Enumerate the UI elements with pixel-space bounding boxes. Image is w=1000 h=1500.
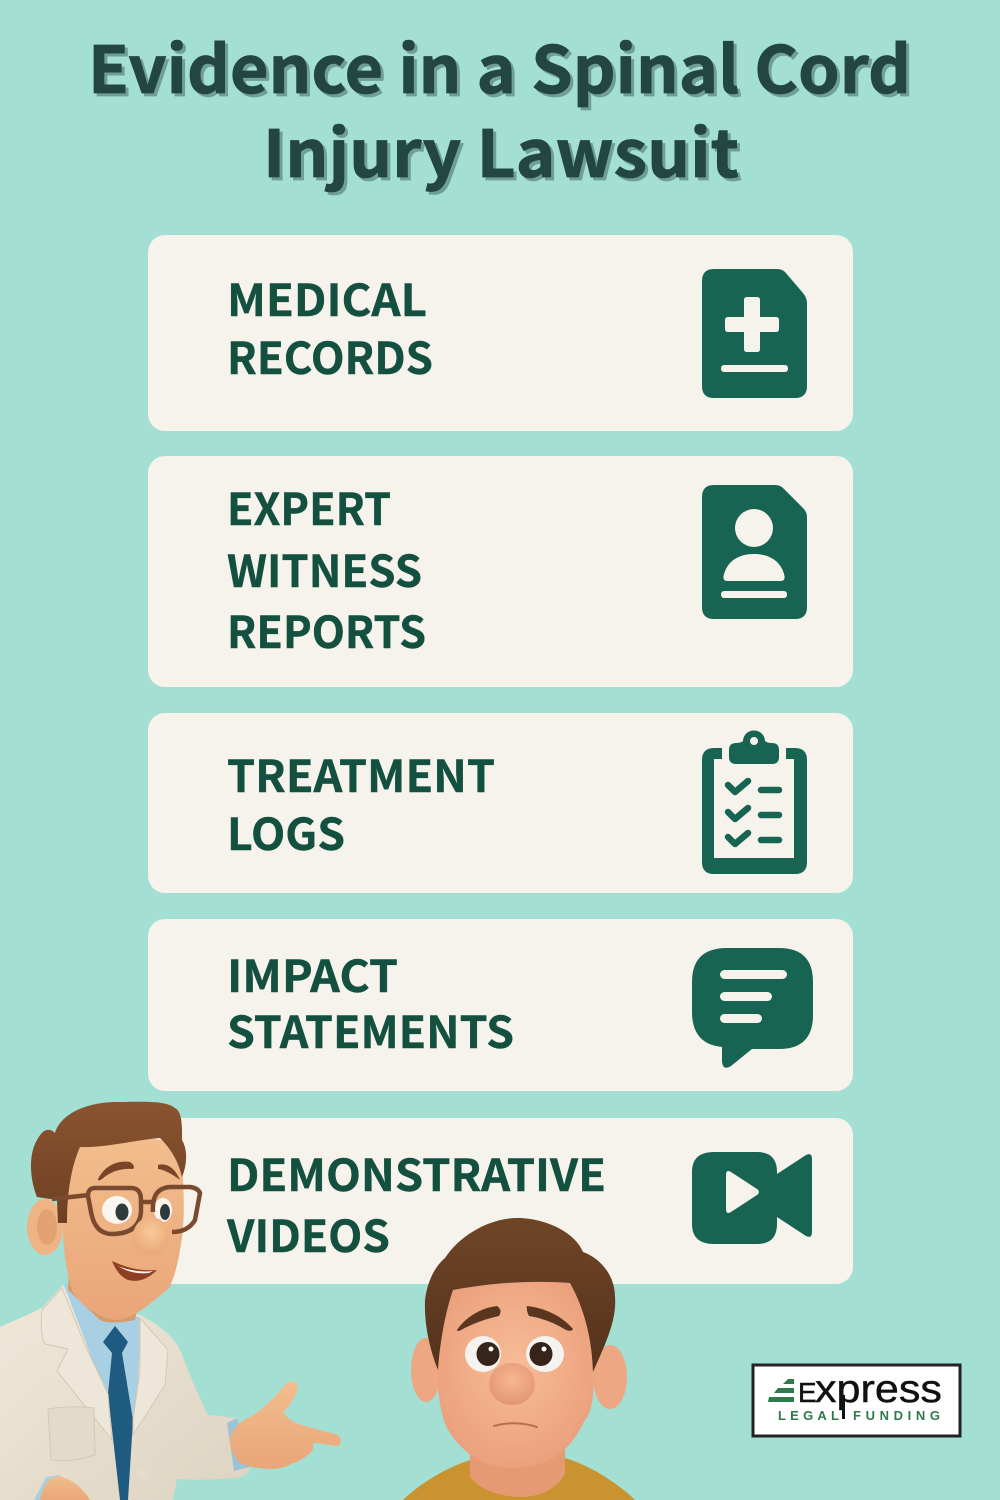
panel: treatment logs: TREATMENT xyxy=(227,741,495,805)
illustration: doctor xyxy=(0,1102,341,1500)
panel: expert witness reports xyxy=(148,456,853,687)
title: Injury Lawsuit xyxy=(266,105,742,199)
title: Evidence in a Spinal Cord xyxy=(88,18,911,112)
icon: video camera xyxy=(692,1152,812,1244)
panel: demonstrative videos: DEMONSTRATIVE xyxy=(227,1140,606,1204)
illustration: patient xyxy=(403,1218,635,1500)
panel: impact statements xyxy=(148,919,853,1091)
panel: impact statements: IMPACT xyxy=(227,941,398,1005)
panel: expert witness reports: WITNESS xyxy=(227,536,422,600)
panel: treatment logs xyxy=(148,713,853,893)
panel: medical records xyxy=(148,235,853,431)
panel: demonstrative videos: VIDEOS xyxy=(226,1201,390,1265)
panel: expert witness reports: REPORTS xyxy=(227,597,426,661)
icon: speech bubble xyxy=(692,948,813,1068)
logo: Express Legal Funding: LEGAL xyxy=(778,1408,839,1423)
panel: medical records: MEDICAL xyxy=(227,265,427,329)
icon: clipboard checklist xyxy=(702,730,807,874)
logo: Express Legal Funding xyxy=(753,1365,960,1436)
logo: Express Legal Funding: xpress xyxy=(815,1368,942,1411)
icon: medical document xyxy=(702,269,807,398)
panel: impact statements: STATEMENTS xyxy=(227,997,514,1061)
panel: treatment logs: LOGS xyxy=(227,799,345,863)
title: Injury Lawsuit xyxy=(263,102,739,196)
panel: medical records: RECORDS xyxy=(227,323,433,387)
title: Evidence in a Spinal Cord xyxy=(91,21,914,115)
logo: Express Legal Funding: E xyxy=(798,1377,817,1408)
logo: Express Legal Funding: FUNDING xyxy=(853,1408,940,1423)
logo stripes xyxy=(768,1379,794,1402)
icon: witness document xyxy=(702,485,807,619)
title xyxy=(88,18,914,199)
panel: expert witness reports: EXPERT xyxy=(227,474,391,538)
panel: demonstrative videos xyxy=(148,1118,853,1284)
